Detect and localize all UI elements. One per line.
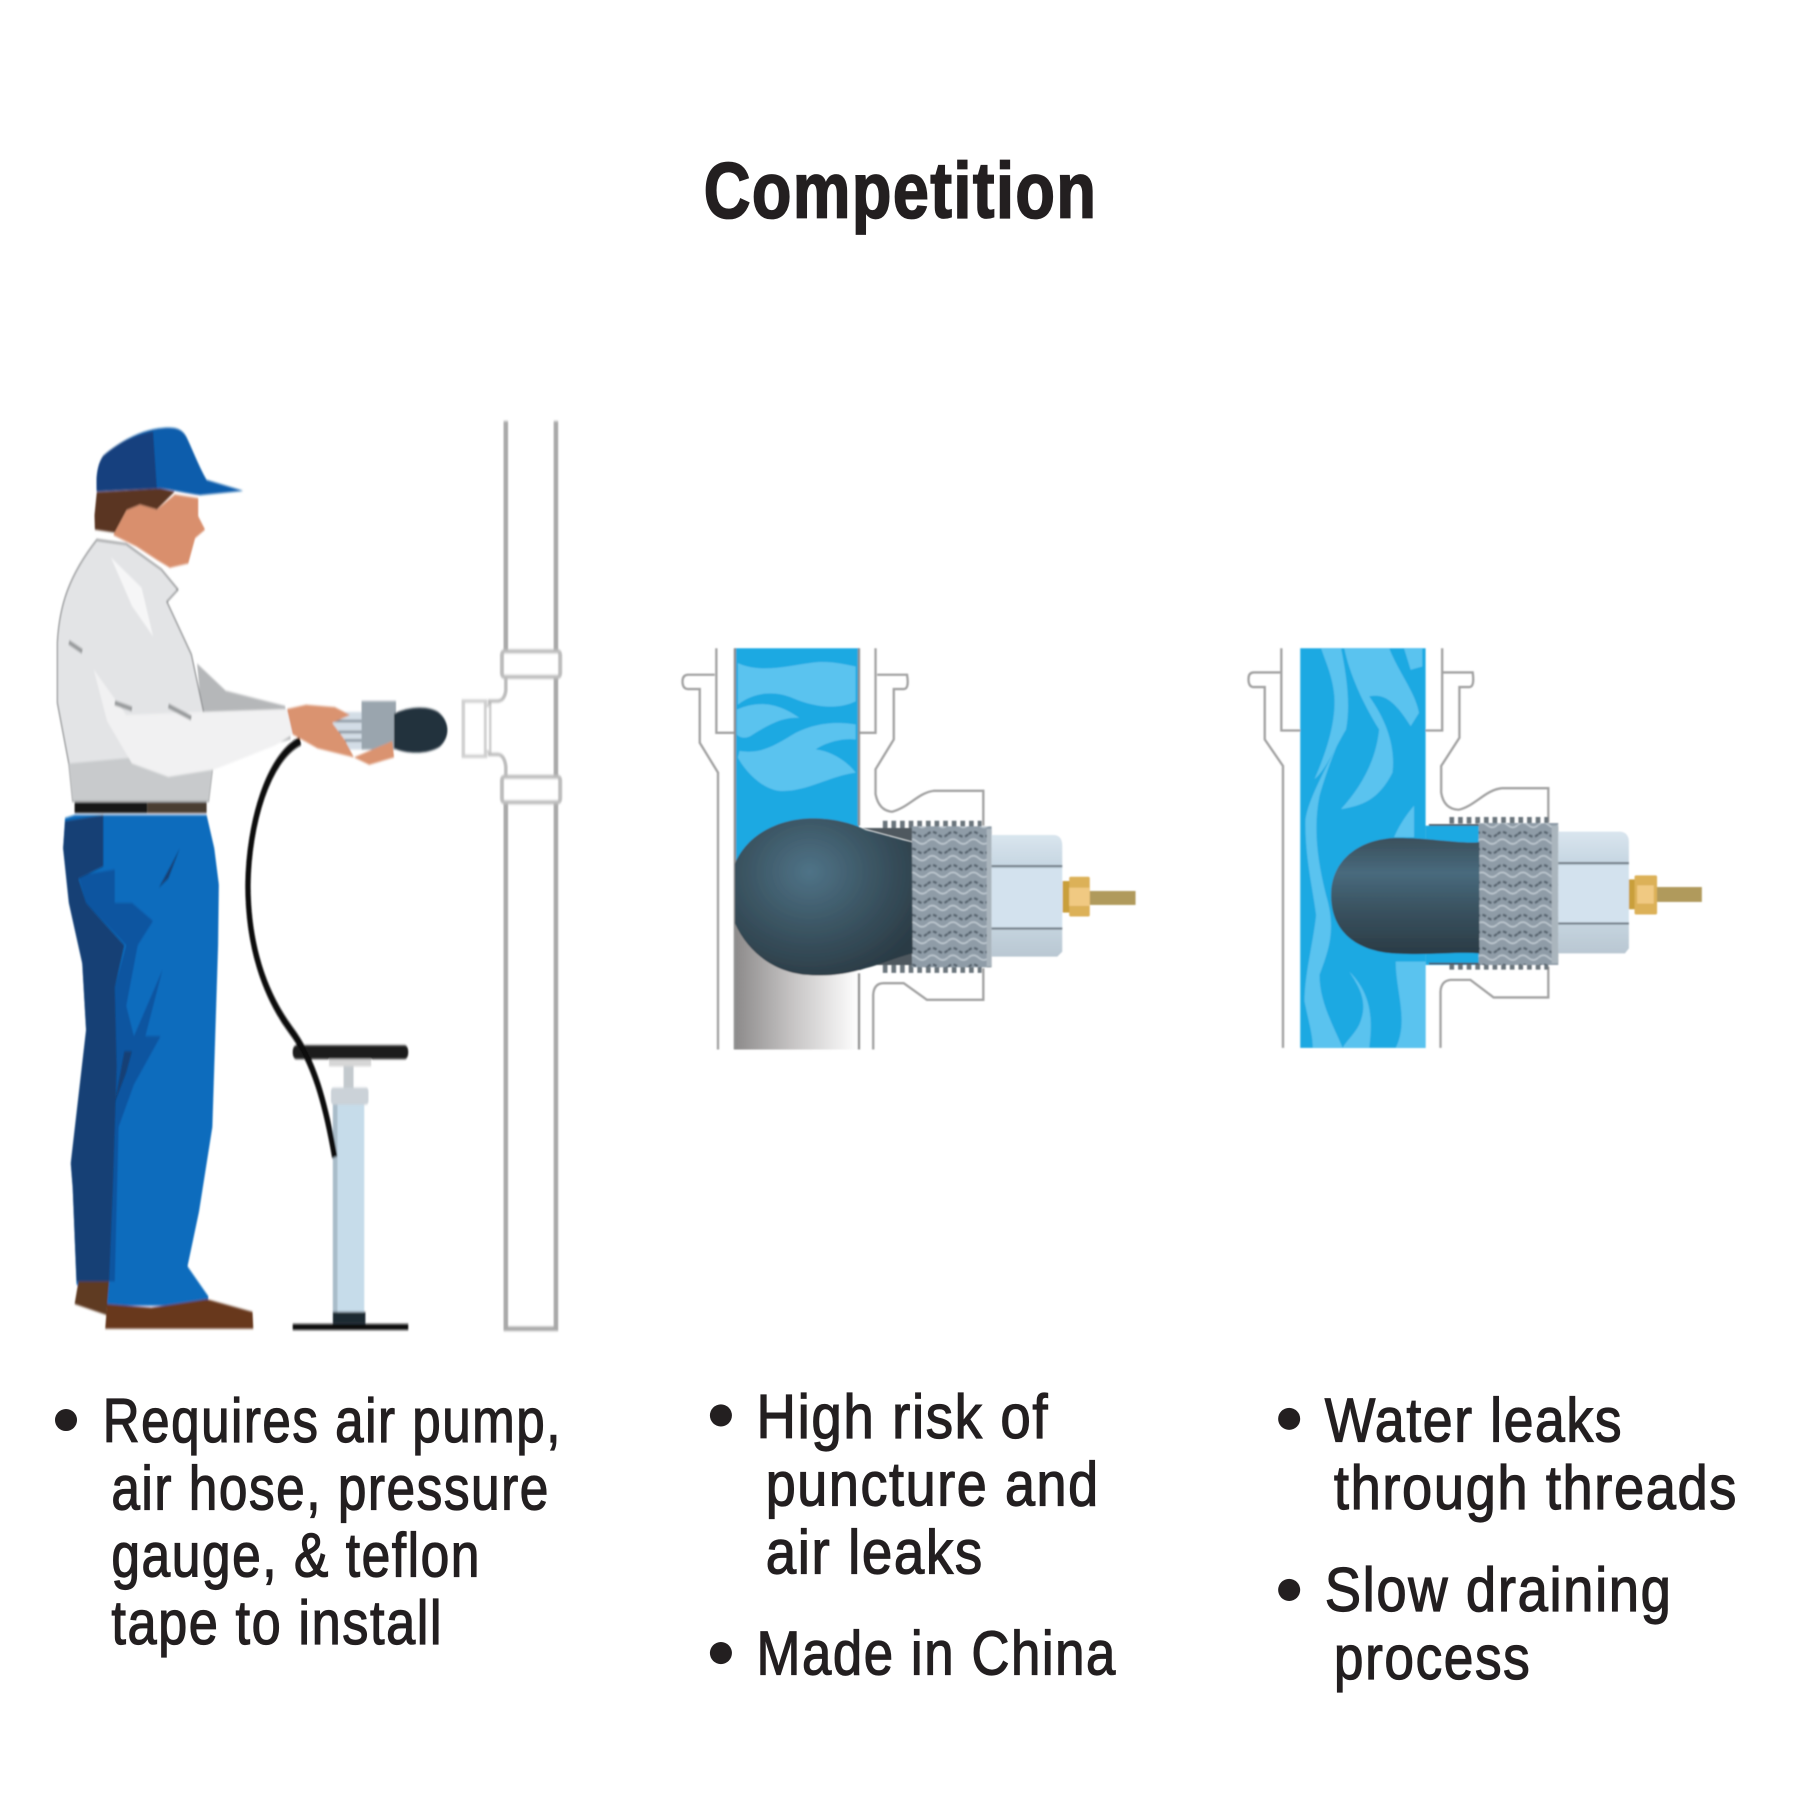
worker (57, 428, 447, 1329)
hair (95, 488, 175, 533)
text block: puncture risk and origin: puncture and (766, 1451, 1100, 1520)
text block: leaks and slow draining: process (1334, 1624, 1531, 1693)
shirt (57, 540, 293, 801)
text block: air pump drawbacks (55, 1387, 562, 1658)
text block: air pump drawbacks: air hose, pressure (111, 1455, 550, 1524)
text block: air pump drawbacks: Requires air pump, (103, 1387, 562, 1456)
illustration: worker inflating plug with air pump at a pipe (57, 421, 560, 1330)
trousers (63, 815, 219, 1306)
pipe contents (735, 648, 859, 1050)
air hose (248, 741, 335, 1157)
fitting outline (1248, 648, 1548, 1048)
illustration: standard plug with water leaking through threads (1248, 648, 1702, 1048)
water column (1300, 648, 1482, 1048)
text block: air pump drawbacks: gauge, & teflon (111, 1522, 481, 1591)
text block: puncture risk and origin: Made in China (757, 1619, 1117, 1688)
hands (287, 705, 394, 765)
illustration: overinflated plug risking puncture in tee fitting (683, 648, 1136, 1050)
brass valve (1063, 877, 1136, 917)
face (113, 494, 205, 568)
text block: puncture risk and origin: air leaks (766, 1518, 984, 1587)
title: Competition (704, 146, 1097, 235)
text block: leaks and slow draining: Slow draining (1325, 1556, 1673, 1625)
rubber bulb (735, 818, 913, 976)
hex nut (992, 835, 1062, 957)
rubber bulb (1331, 838, 1479, 954)
shoes (75, 1282, 253, 1329)
brass valve (1629, 875, 1702, 915)
plug tool (329, 701, 447, 753)
text block: leaks and slow draining: Water leaks (1325, 1386, 1623, 1455)
threaded plug (1429, 820, 1558, 966)
text block: leaks and slow draining: through threads (1334, 1454, 1738, 1523)
belt (75, 802, 207, 813)
text block: leaks and slow draining (1278, 1386, 1738, 1693)
threaded plug (862, 825, 992, 969)
fitting outline (683, 648, 983, 1050)
cap (96, 428, 243, 495)
pipe stack (463, 421, 560, 1329)
text block: puncture risk and origin (710, 1383, 1117, 1688)
text block: air pump drawbacks: tape to install (111, 1589, 443, 1658)
hex nut (1558, 832, 1629, 953)
air pump (293, 1045, 408, 1330)
text block: puncture risk and origin: High risk of (757, 1383, 1049, 1452)
